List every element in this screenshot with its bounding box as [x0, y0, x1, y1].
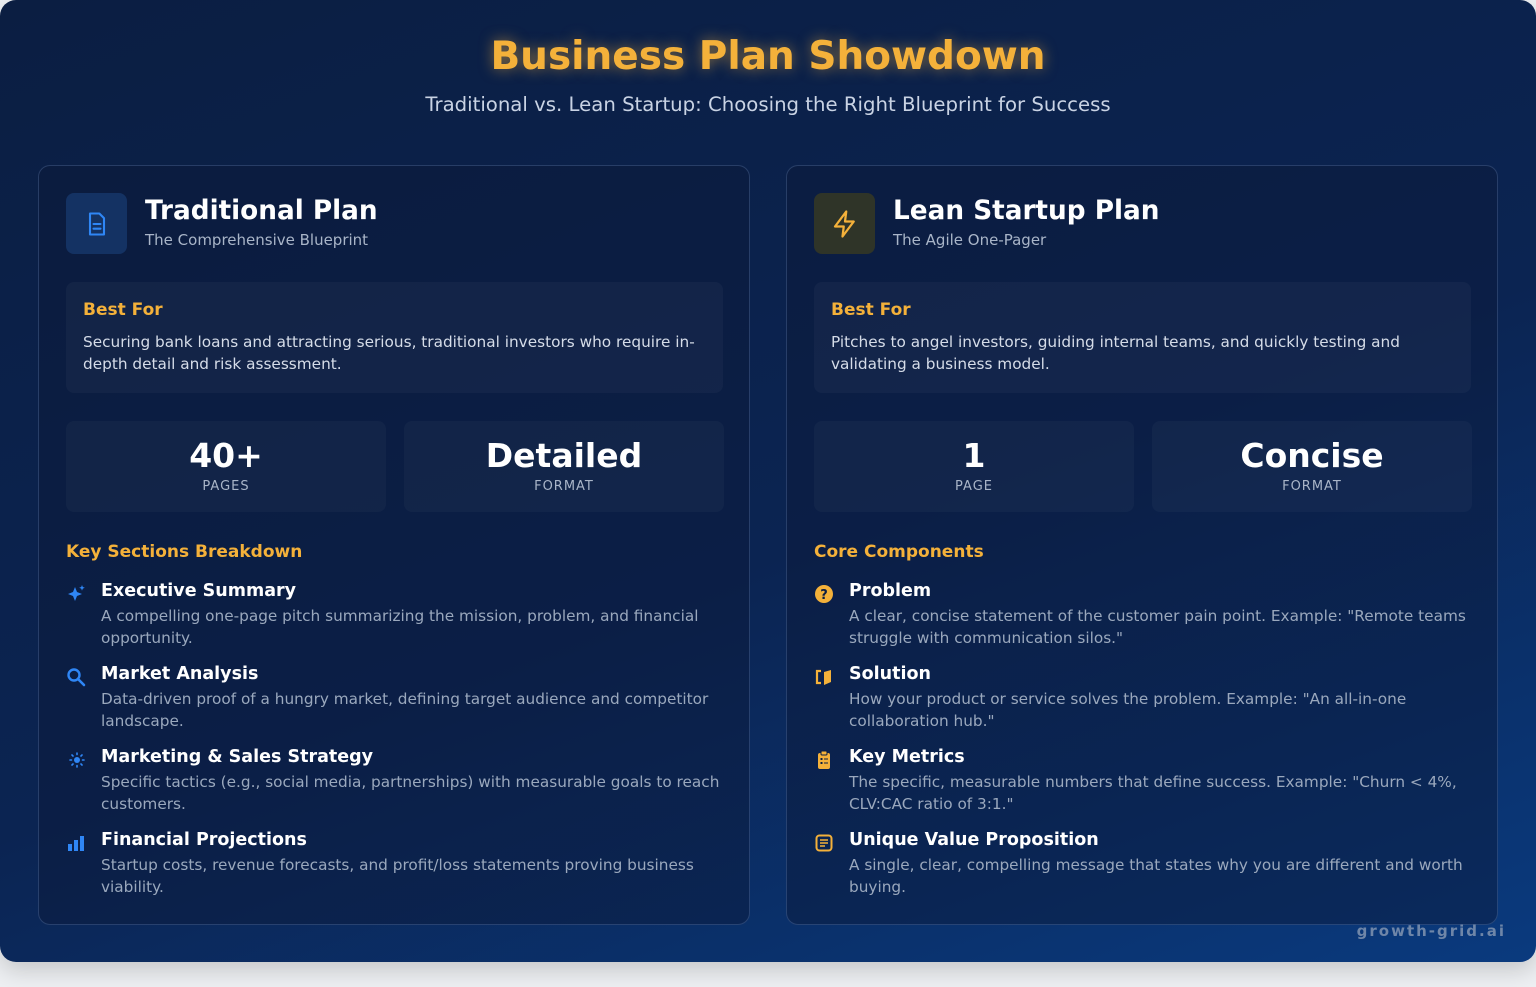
item: problem: ?	[820, 588, 828, 603]
title: Business Plan Showdown	[490, 34, 1046, 79]
item: financial projections: Startup costs, revenue forecasts, and profit/loss statements proving business viability.	[101, 856, 694, 896]
item: key metrics: The specific, measurable numbers that define success. Example: "Churn < 4%, CLV:CAC ratio of 3:1."	[849, 773, 1457, 813]
item: key metrics	[818, 747, 1457, 813]
best for box: Best For	[831, 300, 911, 320]
item: problem: Problem	[849, 581, 931, 601]
item: solution	[816, 664, 1406, 730]
watermark: growth-grid.ai	[1357, 922, 1506, 940]
item: marketing: Marketing & Sales Strategy	[101, 747, 373, 767]
item: market analysis	[67, 664, 708, 730]
stat: format	[1152, 421, 1472, 512]
item: uvp: A single, clear, compelling message that states why you are different and worth buying.	[849, 856, 1463, 896]
subtitle: Traditional vs. Lean Startup: Choosing the Right Blueprint for Success	[425, 93, 1111, 116]
stat: format: Detailed	[486, 436, 642, 475]
item: market analysis: Market Analysis	[101, 664, 258, 684]
subheading: The Agile One-Pager	[893, 231, 1046, 249]
best for box	[814, 282, 1471, 393]
section heading: Key Sections Breakdown	[66, 542, 302, 562]
item: marketing: Specific tactics (e.g., social media, partnerships) with measurable goals to reach customers.	[101, 773, 719, 813]
item: financial projections	[68, 830, 694, 896]
item: problem	[815, 581, 1466, 647]
stat: pages: PAGES	[202, 479, 250, 494]
best for box: Best For	[83, 300, 163, 320]
icon: lightning	[814, 193, 875, 254]
heading: Lean Startup Plan	[893, 196, 1159, 226]
stat: pages: 40+	[189, 436, 263, 475]
stat: format: FORMAT	[534, 479, 594, 494]
item: key metrics: Key Metrics	[849, 747, 965, 767]
heading: Traditional Plan	[145, 196, 378, 226]
item: problem: A clear, concise statement of the customer pain point. Example: "Remote teams struggle with communication silos."	[849, 607, 1466, 647]
stat: format	[404, 421, 724, 512]
panel: lean startup plan	[786, 165, 1498, 925]
best for box: Pitches to angel investors, guiding internal teams, and quickly testing and validating a business model.	[831, 333, 1400, 373]
item: financial projections: Financial Projections	[101, 830, 307, 850]
section heading: Core Components	[814, 542, 984, 562]
item: marketing	[69, 747, 719, 813]
item: market analysis: Data-driven proof of a hungry market, defining target audience and competitor landscape.	[101, 690, 708, 730]
stat: page	[814, 421, 1134, 512]
stat: page: PAGE	[955, 479, 993, 494]
item: uvp	[816, 830, 1463, 896]
item: executive summary: Executive Summary	[101, 581, 296, 601]
item: solution: Solution	[849, 664, 931, 684]
stat: format: FORMAT	[1282, 479, 1342, 494]
stat: format: Concise	[1240, 436, 1384, 475]
subheading: The Comprehensive Blueprint	[145, 231, 368, 249]
best for box	[66, 282, 723, 393]
item: executive summary: A compelling one-page pitch summarizing the mission, problem, and financial opportunity.	[101, 607, 698, 647]
item: uvp: Unique Value Proposition	[849, 830, 1099, 850]
panel: traditional plan	[38, 165, 750, 925]
stat: page: 1	[963, 436, 985, 475]
stat: pages	[66, 421, 386, 512]
item: executive summary	[68, 581, 698, 647]
icon: document	[66, 193, 127, 254]
item: solution: How your product or service solves the problem. Example: "An all-in-one collaboration hub."	[849, 690, 1406, 730]
best for box: Securing bank loans and attracting serious, traditional investors who require in-depth detail and risk assessment.	[83, 333, 695, 373]
